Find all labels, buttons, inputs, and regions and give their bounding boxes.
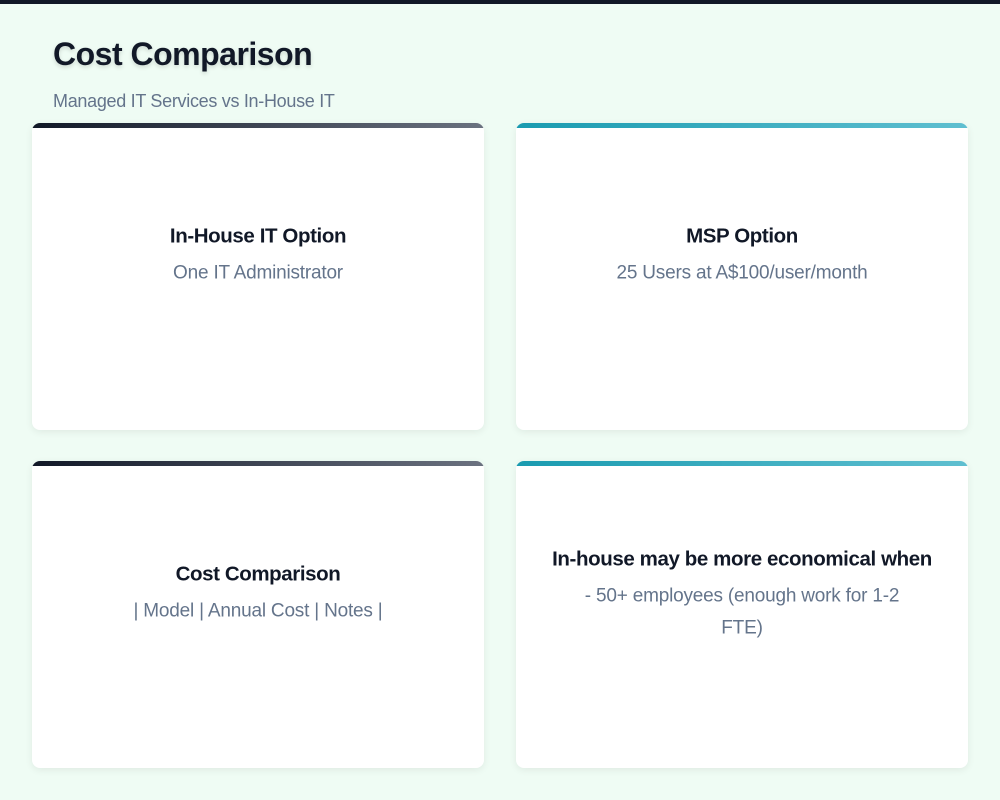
panel: cost comparison: | Model | Annual Cost | Notes |: [133, 600, 383, 621]
panel: cost comparison: Cost Comparison: [176, 562, 340, 585]
title: Cost Comparison: [53, 36, 312, 72]
panel: msp: [516, 123, 968, 430]
panel: in-house: One IT Administrator: [173, 262, 343, 283]
panel: in-house economical: - 50+ employees (enough work for 1-2 FTE): [585, 585, 899, 638]
panel: msp: MSP Option: [686, 224, 798, 247]
panel: msp: 25 Users at A$100/user/month: [616, 262, 868, 283]
subtitle: Managed IT Services vs In-House IT: [53, 91, 335, 111]
panel: in-house economical: In-house may be more economical when: [552, 547, 932, 570]
panel: in-house economical: [516, 461, 968, 768]
panel: cost comparison: [32, 461, 484, 768]
panel: in-house: In-House IT Option: [170, 224, 346, 247]
panel: in-house: [32, 123, 484, 430]
